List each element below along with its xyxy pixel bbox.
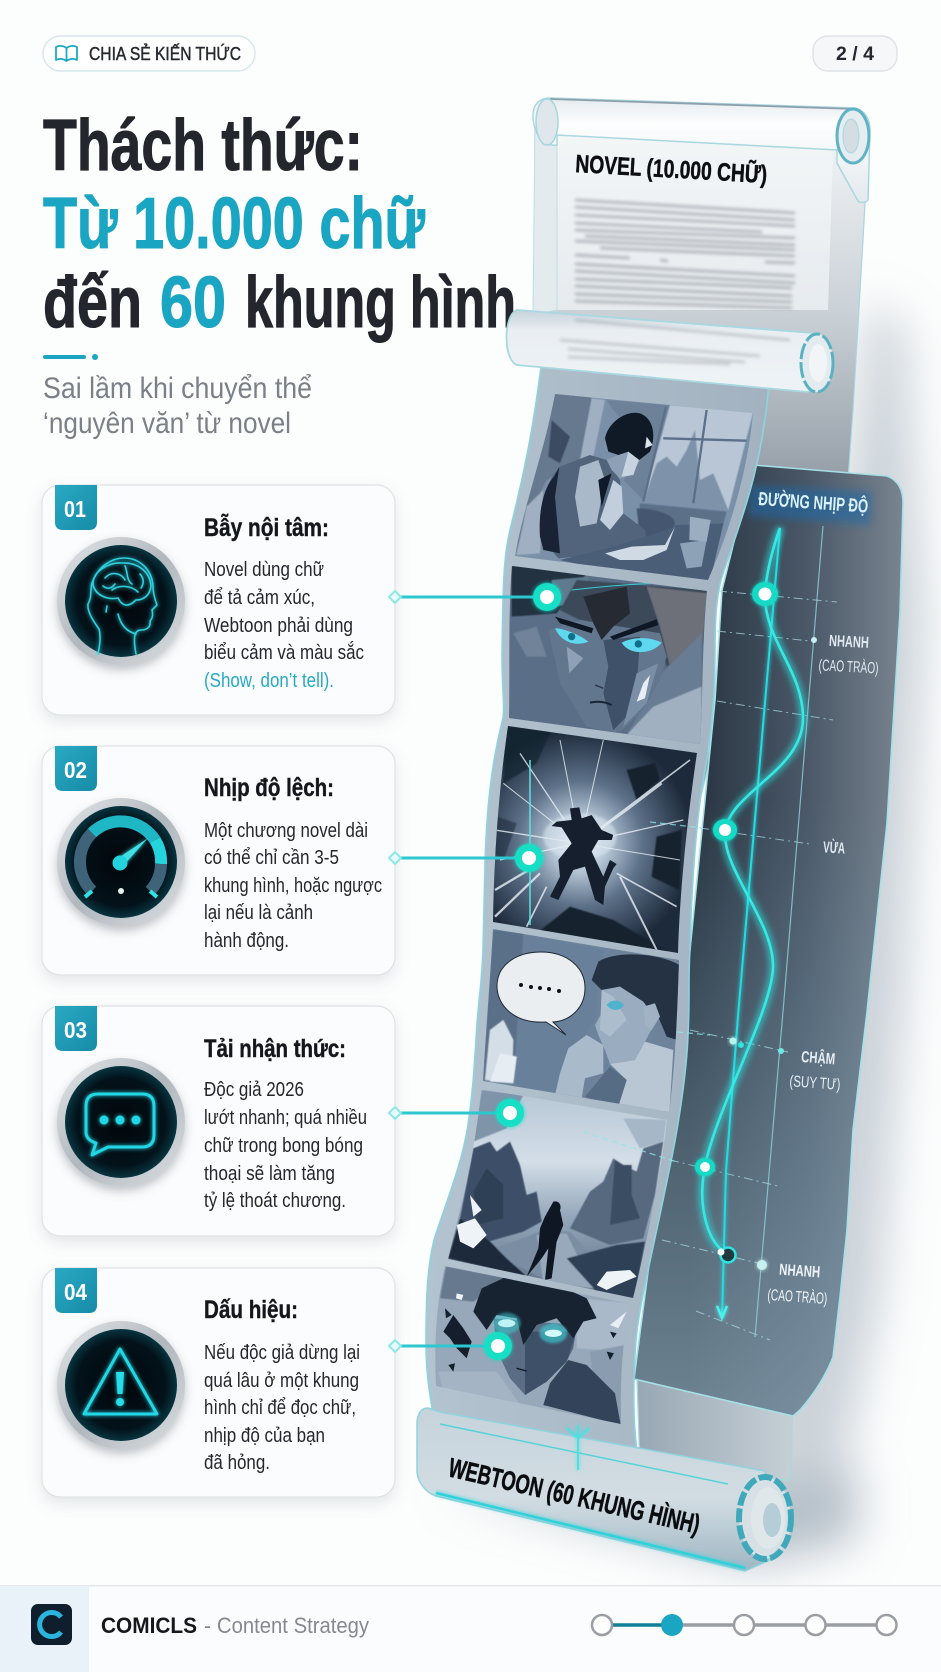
glass backing sheet [535,130,868,1480]
pace label: fast top [818,632,880,677]
number badge 02 [55,746,97,791]
novel body text lines [575,200,795,308]
panel: card 03 [42,1006,395,1236]
connector: card 03 to panel [389,1099,524,1127]
title accent rule [43,354,98,360]
badge label: CHIA SẺ KIẾN THỨC [89,43,241,64]
card body: khung hình, hoặc ngược [204,875,382,897]
pace label: fast top: NHANH [829,633,869,652]
footer [0,1585,941,1672]
number badge 03: 03 [64,1017,87,1043]
pace label: slow: CHẬM [801,1047,836,1068]
number badge 04 [55,1268,97,1313]
panel title glow [748,485,872,525]
panel: pacing curve board [634,465,903,1416]
dashed guides [662,591,837,1340]
title: đến [43,263,142,343]
card body: đã hỏng. [204,1452,270,1474]
brand text: Content Strategy [217,1613,369,1638]
card body: quá lâu ở một khung [204,1370,359,1392]
pace label: slow: (SUY TƯ) [789,1073,841,1094]
brand text: COMICLS [101,1613,197,1638]
pace label: medium: VỪA [823,837,846,858]
strip overlays: guide traces on panels [530,760,710,1162]
title: Thách thức: [43,106,363,186]
axis line [755,526,823,1337]
card body: (Show, don’t tell). [204,670,334,692]
number badge 01 [55,485,97,530]
card body: chữ trong bong bóng [204,1135,363,1157]
card body: lại nếu là cảnh [204,902,313,924]
card body: nhịp độ của bạn [204,1425,325,1447]
webtoon roll [417,1408,791,1571]
scroll cast shadow [440,300,925,1570]
card body: lướt nhanh; quá nhiều [204,1107,367,1129]
number badge 03 [55,1006,97,1051]
comic panel 1: man at desk [515,394,753,580]
icon: warning triangle [57,1321,185,1449]
card body: biểu cảm và màu sắc [204,641,364,664]
card body: Nếu độc giả dừng lại [204,1342,360,1364]
header badge [43,36,255,71]
straight reference line [722,528,780,1317]
number badge 01: 01 [64,496,86,522]
panel: card 01 [42,485,395,715]
title: 60 [160,263,226,343]
title: khung hình [245,263,516,343]
icon: chat bubble [57,1058,185,1186]
curve nodes [695,582,817,1270]
novel heading: NOVEL (10.000 CHỮ) [575,148,768,189]
number badge 04: 04 [64,1279,87,1305]
webtoon strip [426,350,770,1470]
speech bubble [497,952,585,1035]
novel roll: paper and top roller [533,98,870,315]
card heading: Nhịp độ lệch: [204,774,334,802]
icon: brain in head [57,537,185,665]
brand text [101,1613,369,1638]
subtitle: ‘nguyên văn’ từ novel [43,407,291,440]
down arrow glyph [567,1425,589,1470]
card body [204,1079,367,1212]
logo [31,1604,72,1645]
card body: có thể chỉ cần 3-5 [204,847,339,869]
comic panel 3: action explosion [490,723,700,957]
card body: Webtoon phải dùng [204,615,353,637]
card heading: Bẫy nội tâm: [204,512,329,542]
panel: card 02 [42,746,395,975]
page counter: 2 / 4 [836,44,874,65]
card body: tỷ lệ thoát chương. [204,1190,346,1212]
pace label: fast bottom: NHANH [779,1262,821,1281]
curve arrowhead [717,1306,727,1318]
card body: Một chương novel dài [204,820,368,842]
panel: card 04 [42,1268,395,1497]
card body [204,820,382,952]
card body: để tả cảm xúc, [204,587,315,609]
card body: thoại sẽ làm tăng [204,1163,335,1185]
card body: Độc giả 2026 [204,1079,304,1101]
comic panel 5: figure in ruined landscape [443,1085,670,1305]
icon: speedometer gauge [57,798,185,926]
number badge 02: 02 [64,757,87,783]
pacing curve [702,528,803,1250]
icon: open book [56,46,77,61]
comic panel 4: thinking with speech bubble [480,927,683,1117]
comic panel 6: glowing eyes [435,1266,626,1424]
card heading: Dấu hiệu: [204,1296,298,1324]
comic panel 2: determined face [508,563,708,747]
pace label: fast top: (CAO TRÀO) [818,655,879,677]
card body: hình chỉ để đọc chữ, [204,1397,356,1419]
connector: card 04 to panel [389,1332,512,1360]
brand text: - [204,1613,211,1638]
connector: card 02 to panel [389,844,543,872]
pace label: fast bottom: (CAO TRÀO) [767,1285,828,1308]
page counter [813,36,897,71]
card heading: Tải nhận thức: [204,1035,346,1063]
card body [204,1342,360,1474]
panel title: ĐƯỜNG NHỊP ĐỘ [758,488,869,518]
roller end ring [739,1477,791,1559]
title [43,106,516,343]
card body: Novel dùng chữ [204,559,324,581]
novel roll: bottom roller [506,310,833,392]
subtitle: Sai lầm khi chuyển thể [43,372,312,405]
pace label: fast bottom [767,1261,830,1308]
subtitle [43,372,312,440]
progress stepper [592,1614,896,1636]
title: Từ 10.000 chữ [43,184,426,264]
card body [204,559,364,692]
connector: card 01 to panel [389,583,561,611]
webtoon heading: WEBTOON (60 KHUNG HÌNH) [446,1452,703,1540]
pace label: slow [789,1046,843,1094]
card body: hành động. [204,930,289,952]
